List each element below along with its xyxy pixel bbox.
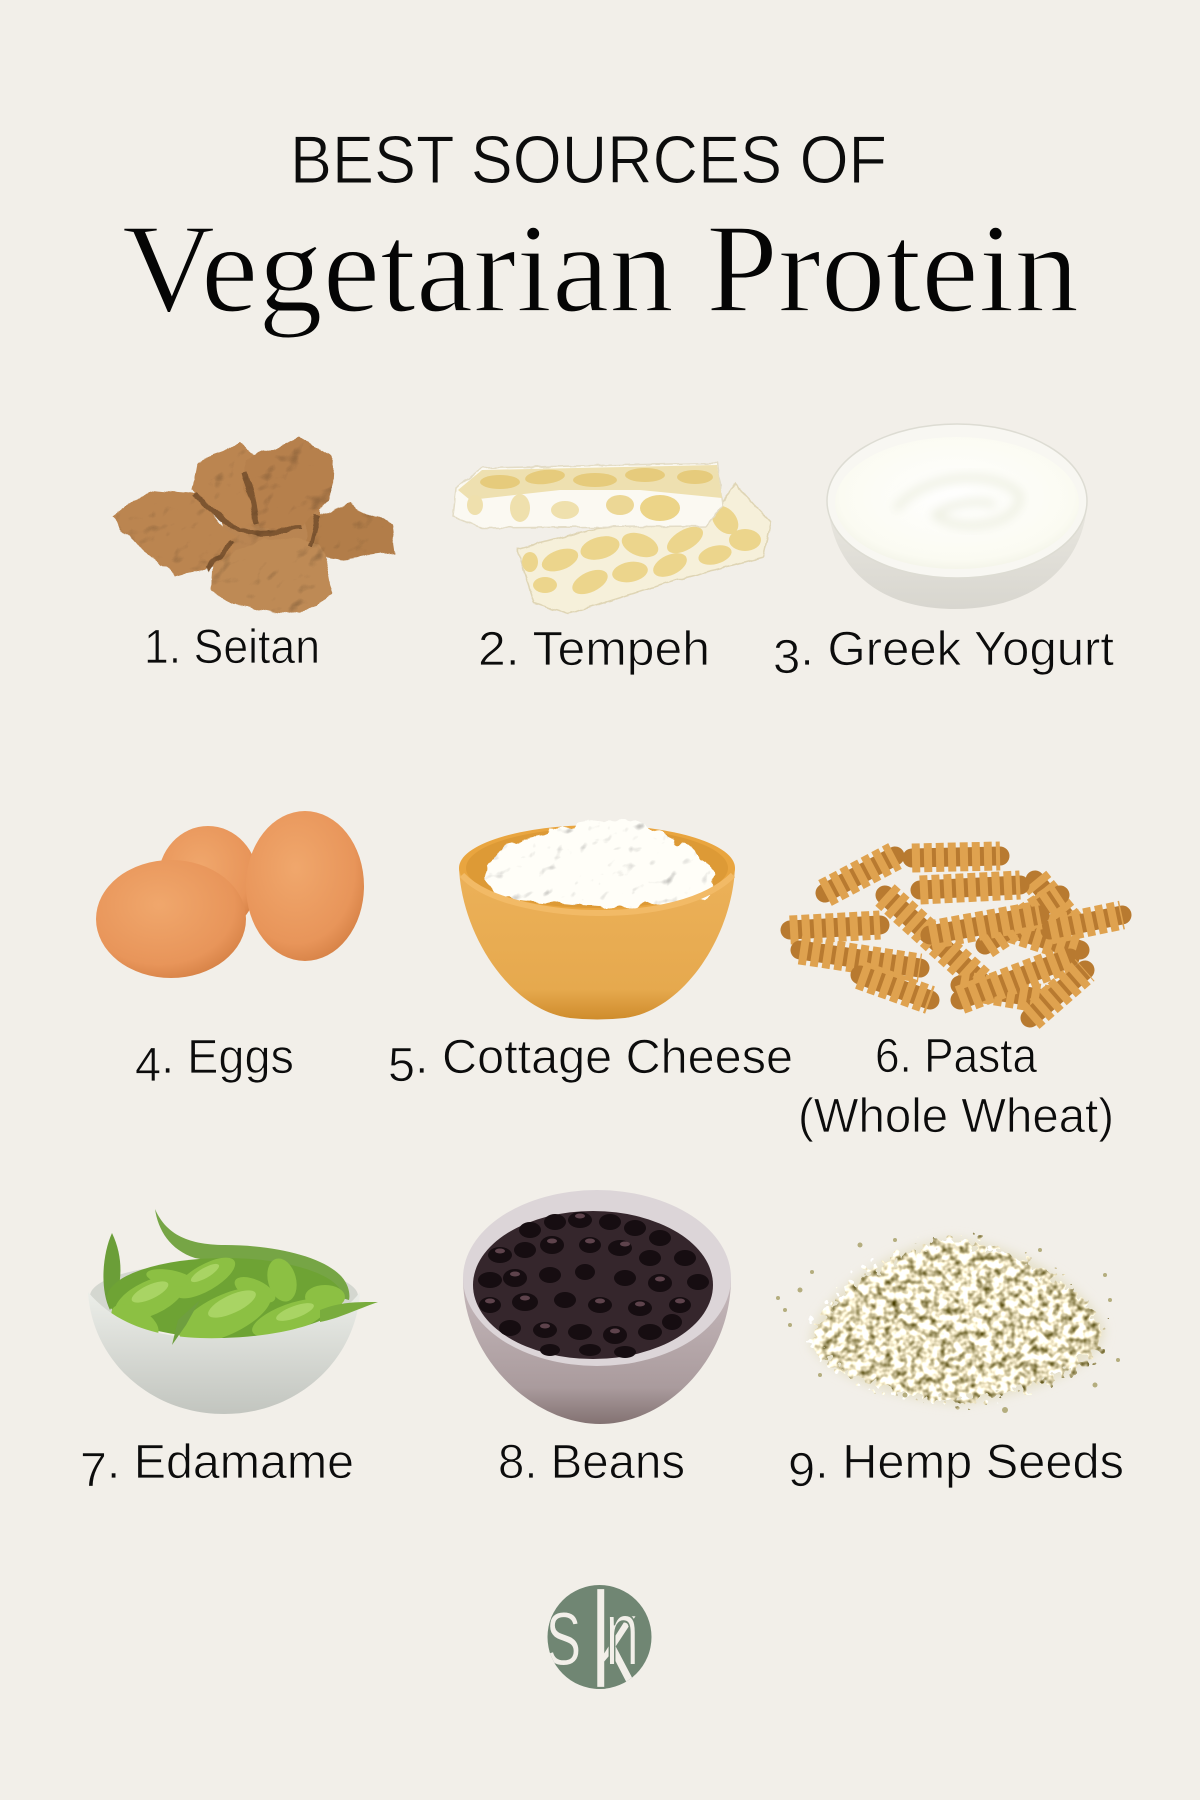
- label: greek yogurt: . Greek Yogurt: [800, 623, 1114, 676]
- title: [122, 122, 1079, 339]
- title line: vegetarian protein: Vegetarian Protein: [122, 199, 1079, 339]
- label: tempeh: 2. Tempeh: [478, 623, 710, 676]
- label: edamame: . Edamame: [107, 1436, 354, 1489]
- logo: [548, 1585, 652, 1689]
- logo: k: [590, 1564, 639, 1718]
- icon: black beans bowl: [463, 1190, 731, 1424]
- label: whole wheat: (Whole Wheat): [798, 1090, 1114, 1143]
- label: eggs: . Eggs: [161, 1031, 294, 1084]
- icon: fusilli pasta: [790, 856, 1122, 1018]
- logo: n: [605, 1580, 639, 1685]
- icon: hemp seed pile: [776, 1238, 1120, 1413]
- label: greek yogurt: 3: [773, 631, 800, 684]
- panel: beans: [463, 1190, 731, 1489]
- title line: best sources of: BEST SOURCES OF: [290, 122, 887, 198]
- label: hemp seeds: . Hemp Seeds: [815, 1436, 1124, 1489]
- label: cottage cheese: . Cottage Cheese: [415, 1031, 793, 1084]
- label: pasta: 6. Pasta: [875, 1030, 1037, 1083]
- icon: tempeh slabs: [453, 463, 771, 614]
- panel: edamame: [80, 1209, 378, 1497]
- logo: s: [546, 1577, 582, 1687]
- panel: seitan: [110, 436, 396, 674]
- panel: hemp seeds: [776, 1238, 1124, 1497]
- label: edamame: 7: [80, 1444, 107, 1497]
- label: hemp seeds: 9: [788, 1444, 815, 1497]
- label: seitan: 1. Seitan: [144, 621, 320, 674]
- panel: cottage cheese: [388, 820, 793, 1092]
- label: cottage cheese: 5: [388, 1039, 415, 1092]
- icon: edamame bowl: [88, 1209, 378, 1414]
- label: eggs: 4: [135, 1039, 161, 1092]
- panel: greek yogurt: [773, 424, 1114, 684]
- panel: tempeh: [453, 463, 771, 676]
- panel: whole wheat pasta: [790, 856, 1122, 1143]
- icon: cottage cheese bowl: [459, 820, 735, 1020]
- panel: eggs: [96, 811, 364, 1092]
- icon: yogurt bowl: [827, 424, 1087, 609]
- icon: seitan chunks: [110, 436, 396, 616]
- icon: eggs: [96, 811, 364, 978]
- label: beans: 8. Beans: [498, 1436, 685, 1489]
